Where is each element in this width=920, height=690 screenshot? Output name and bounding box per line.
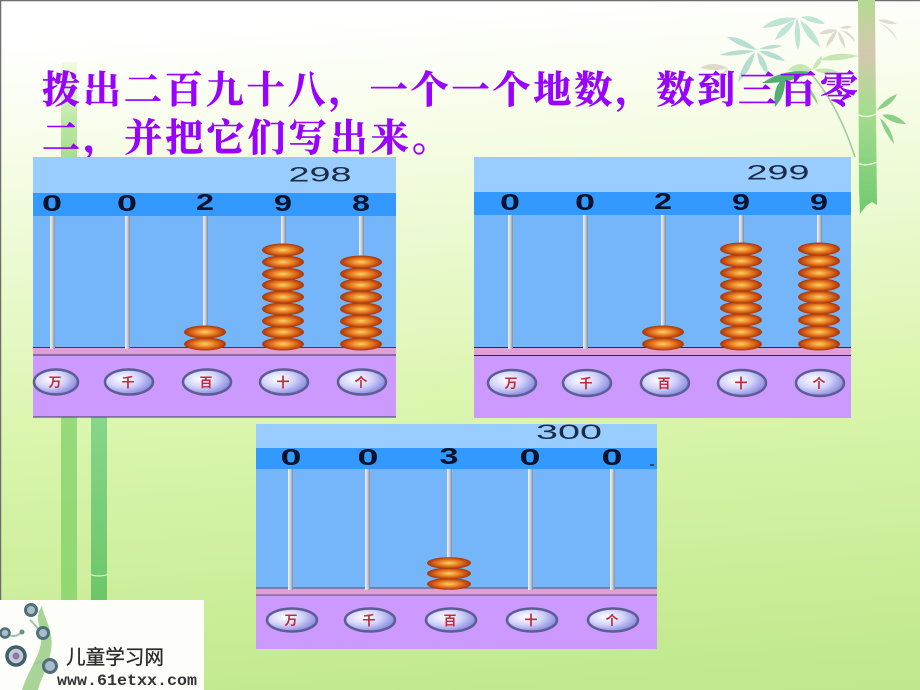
panel: abacus 299: [474, 157, 851, 418]
digits row: 0: [575, 189, 595, 215]
place value buttons: 百: [199, 375, 213, 390]
bamboo stalks left: [61, 62, 109, 602]
beads: [184, 244, 382, 350]
place value buttons: 十: [276, 375, 290, 390]
place value buttons: 万: [48, 375, 62, 390]
readout 299: 299: [746, 162, 810, 184]
icon: ornamental tree: [0, 604, 56, 690]
place value buttons: 百: [657, 376, 671, 391]
place value buttons: [267, 608, 638, 632]
rods: [288, 469, 615, 590]
digits row: [280, 443, 622, 470]
place value buttons: 十: [734, 376, 748, 391]
place value buttons: 万: [504, 376, 518, 391]
logo name: 儿童学习网: [66, 646, 164, 669]
digits row: 8: [352, 190, 370, 216]
place value buttons: [34, 370, 386, 394]
digits row: 0: [280, 444, 302, 470]
title: [42, 70, 858, 161]
place value buttons: 千: [579, 376, 593, 391]
place value buttons: 十: [524, 613, 538, 628]
panel: abacus 298: [33, 157, 396, 417]
digits row: 0: [358, 444, 378, 470]
digits row: 9: [810, 189, 828, 215]
digits row: 9: [274, 190, 292, 216]
readout 298: 298: [288, 164, 352, 186]
digits row: 2: [196, 189, 214, 215]
place value buttons: 万: [284, 613, 298, 628]
digits row: 0: [42, 190, 62, 216]
place value buttons: 个: [812, 376, 826, 391]
digits row: 0: [117, 190, 137, 216]
digits row: 0: [500, 189, 520, 215]
digits row: 0: [520, 444, 540, 470]
place value buttons: 百: [443, 613, 457, 628]
rods: [508, 215, 822, 349]
place value buttons: 千: [362, 613, 376, 628]
digits row: [42, 189, 370, 216]
digits row: [500, 188, 828, 215]
digits row: 0: [602, 444, 622, 470]
place value buttons: 千: [121, 375, 135, 390]
place value buttons: [488, 370, 844, 396]
digits row: 3: [440, 443, 458, 469]
logo: children's learning site: [0, 600, 204, 690]
title: 拨出二百九十八，一个一个地数，数到三百零: [42, 70, 858, 113]
logo url: www.61etxx.com: [57, 672, 197, 690]
title: 二，并把它们写出来。: [42, 118, 450, 161]
bamboo stalk and leaves top right: [700, 0, 906, 214]
place value buttons: 个: [354, 375, 368, 390]
beads: [642, 242, 840, 350]
place value buttons: 个: [605, 613, 619, 628]
digits row: 9: [732, 189, 750, 215]
digits row: 2: [654, 188, 672, 214]
panel: abacus 300: [256, 421, 657, 649]
beads: [427, 557, 471, 590]
rods: [50, 216, 364, 349]
readout 300: 300: [536, 421, 602, 444]
